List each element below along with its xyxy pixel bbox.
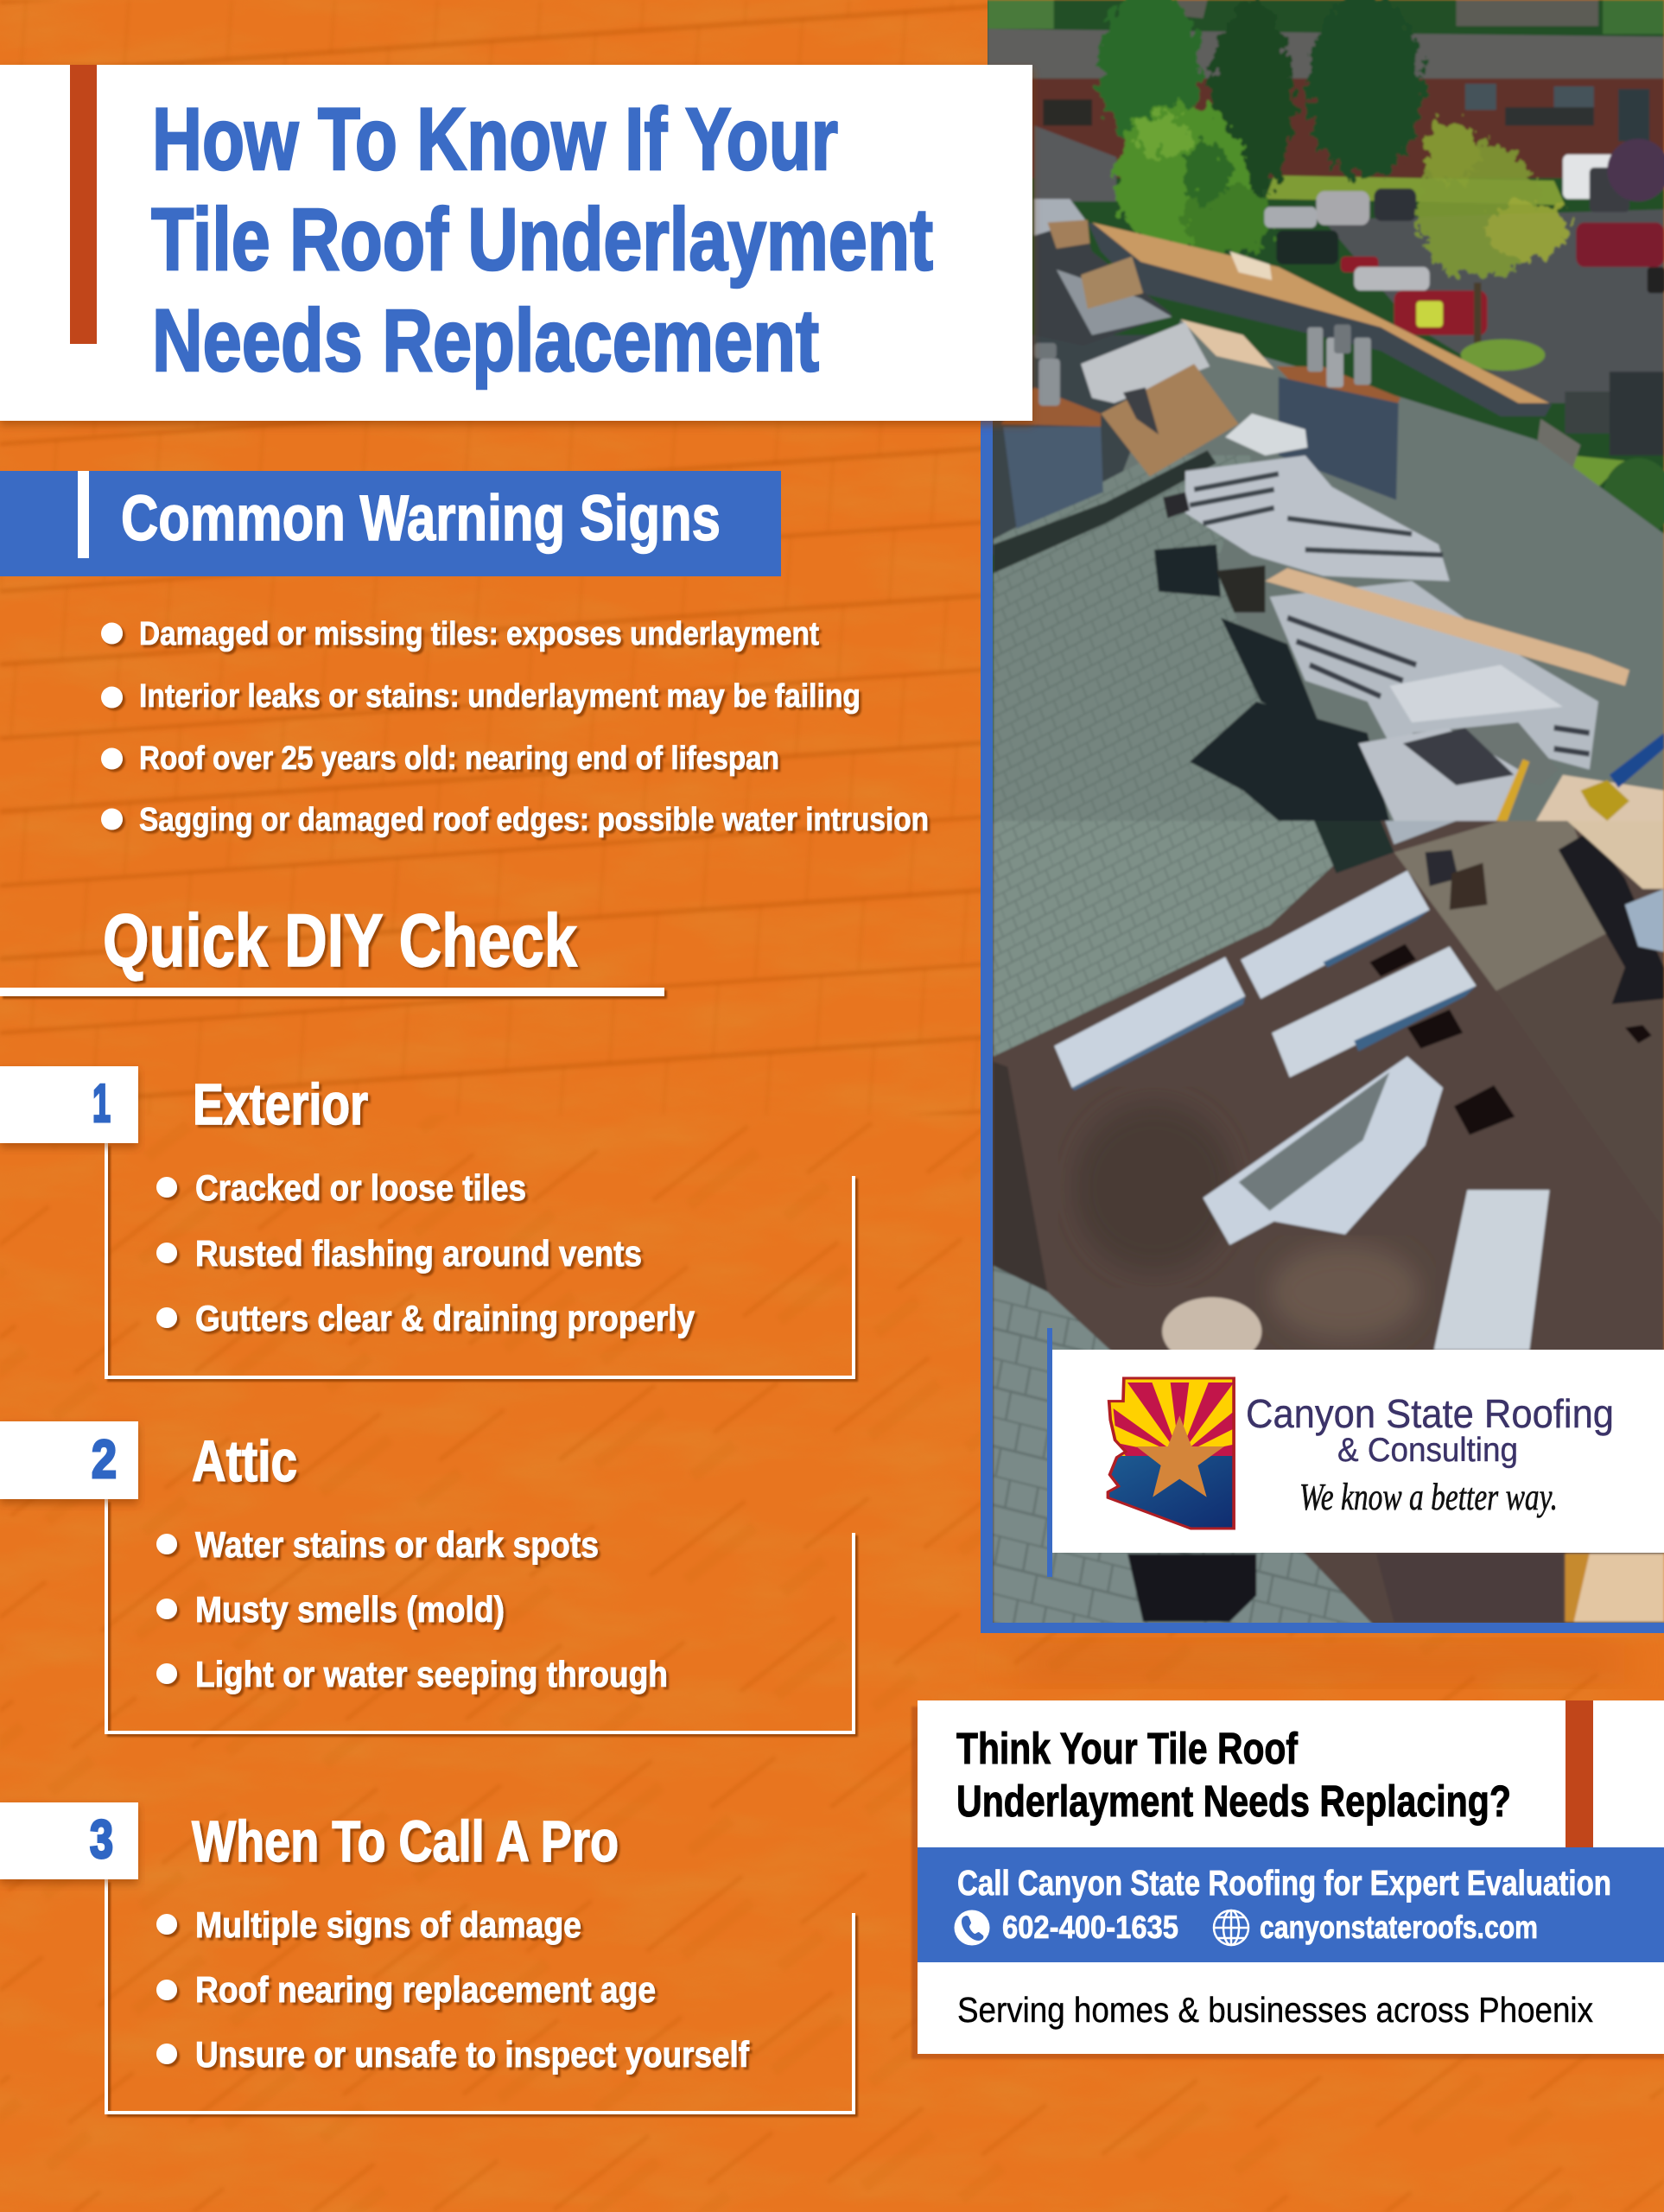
step 1 frame bbox=[106, 1143, 854, 1377]
warning signs list: Damaged or missing tiles: exposes underlayment bbox=[139, 616, 819, 652]
icon: globe bbox=[1214, 1910, 1248, 1945]
icon: phone bbox=[954, 1910, 990, 1946]
heading: quick DIY check: Quick DIY Check bbox=[103, 899, 577, 982]
heading band: common warning signs bbox=[0, 471, 781, 576]
step 1 items: Gutters clear & draining properly bbox=[195, 1298, 695, 1338]
icon: Arizona flag state logo bbox=[1102, 1374, 1240, 1531]
step 2 items bbox=[156, 1524, 668, 1694]
title: How To Know If Your bbox=[152, 90, 838, 188]
logo panel bbox=[1047, 1328, 1664, 1577]
step 1: exterior bbox=[0, 1066, 854, 1377]
logo wordmark bbox=[1246, 1391, 1614, 1518]
step 2 items: Light or water seeping through bbox=[195, 1654, 668, 1694]
step 1 number: 1 bbox=[92, 1074, 111, 1134]
warning signs list: Interior leaks or stains: underlayment may be failing bbox=[139, 678, 861, 715]
logo wordmark: We know a better way. bbox=[1299, 1476, 1558, 1518]
title: Tile Roof Underlayment bbox=[151, 190, 933, 289]
step 3 frame bbox=[106, 1879, 854, 2113]
heading: quick DIY check bbox=[0, 899, 664, 996]
step 1 heading: Exterior bbox=[193, 1072, 368, 1137]
step 3 items: Roof nearing replacement age bbox=[195, 1969, 656, 2010]
step 2 items: Water stains or dark spots bbox=[195, 1524, 599, 1565]
step 3 items: Unsure or unsafe to inspect yourself bbox=[195, 2034, 750, 2075]
service area line: Serving homes & businesses across Phoenix bbox=[957, 1990, 1593, 2030]
step 1 items: Rusted flashing around vents bbox=[195, 1233, 642, 1274]
warning signs list bbox=[101, 616, 929, 838]
red accent bar bbox=[1566, 1700, 1593, 1847]
step 2 items: Musty smells (mold) bbox=[195, 1589, 505, 1630]
call to action panel bbox=[911, 1700, 1664, 2059]
step 1 items: Cracked or loose tiles bbox=[195, 1167, 526, 1208]
photo frame: blue border bbox=[981, 421, 1664, 1633]
step 3: when to call a pro bbox=[0, 1802, 854, 2113]
step 3 heading: When To Call A Pro bbox=[192, 1809, 619, 1874]
heading band: common warning signs: Common Warning Signs bbox=[121, 482, 721, 554]
step 3 number bbox=[0, 1802, 138, 1879]
contact band: canyonstateroofs.com bbox=[1260, 1910, 1538, 1945]
contact band: 602-400-1635 bbox=[1002, 1910, 1178, 1945]
title panel bbox=[0, 65, 1032, 421]
step 2 number: 2 bbox=[92, 1430, 117, 1490]
step 1 items bbox=[156, 1167, 695, 1338]
title bbox=[151, 90, 933, 390]
logo wordmark: Canyon State Roofing bbox=[1246, 1391, 1614, 1436]
CTA question: Think Your Tile Roof bbox=[956, 1724, 1299, 1773]
step 2: attic bbox=[0, 1421, 854, 1732]
step 3 number: 3 bbox=[90, 1810, 113, 1870]
CTA question bbox=[956, 1724, 1511, 1826]
step 3 items bbox=[156, 1904, 750, 2075]
step 1 number bbox=[0, 1066, 138, 1143]
step 3 items: Multiple signs of damage bbox=[195, 1904, 581, 1945]
step 2 frame bbox=[106, 1499, 854, 1732]
step 2 number bbox=[0, 1421, 138, 1499]
red accent bar bbox=[70, 65, 97, 344]
warning signs list: Sagging or damaged roof edges: possible water intrusion bbox=[139, 802, 929, 838]
CTA question: Underlayment Needs Replacing? bbox=[956, 1777, 1511, 1826]
step 2 heading: Attic bbox=[192, 1429, 297, 1494]
roof work aerial photo bbox=[968, 0, 1664, 1642]
logo wordmark: & Consulting bbox=[1337, 1432, 1518, 1469]
contact band bbox=[918, 1847, 1664, 1962]
title: Needs Replacement bbox=[152, 291, 819, 390]
warning signs list: Roof over 25 years old: nearing end of lifespan bbox=[139, 741, 779, 777]
